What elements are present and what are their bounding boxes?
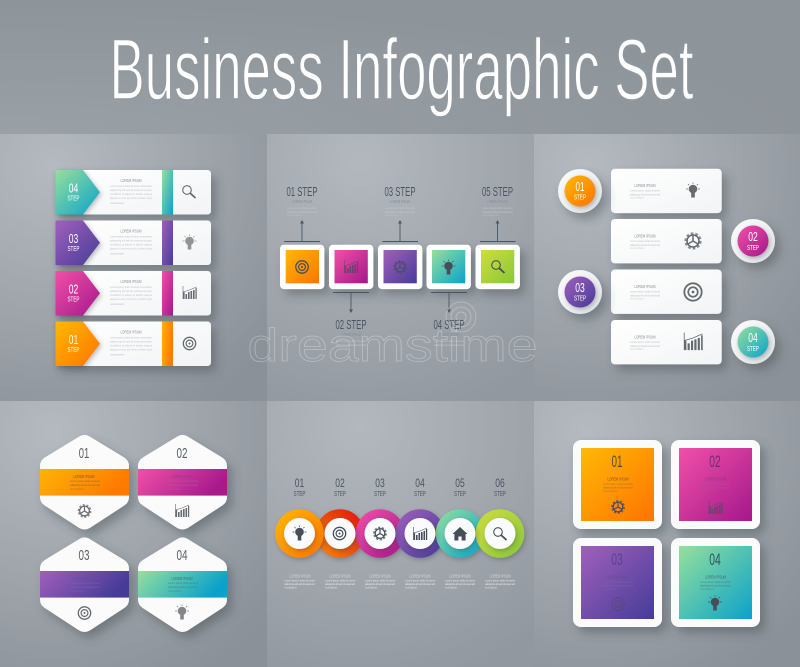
card: 03 step: incididunt ut labore et dolore magna (110, 242, 153, 246)
panel: arrow step cards (56, 170, 211, 366)
label: 01 step: LOREM IPSUM (292, 199, 312, 204)
circle 03 pink (356, 509, 404, 558)
square 03: 03 (611, 550, 623, 569)
step labels: STEP (454, 489, 466, 498)
card: 01 step (56, 322, 211, 366)
card 2: LOREM IPSUM (634, 234, 656, 238)
watermark (248, 302, 538, 371)
label: 03 step: Lorem ipsum dolor sit amet (385, 206, 415, 210)
card: 04 step: LOREM IPSUM (120, 178, 142, 183)
hexagon 03: LOREM IPSUM (74, 576, 95, 581)
badge 01: STEP (574, 194, 586, 202)
panel: six circles timeline (275, 476, 524, 590)
card: 02 step: 02 (69, 282, 78, 296)
card: 04 step: aliqua ut enim ad minim veniam quis (110, 196, 153, 200)
card: 04 step: Lorem ipsum dolor sit amet consectetur (110, 184, 152, 188)
square 02: LOREM IPSUM (705, 476, 726, 482)
step labels: STEP (494, 489, 506, 498)
badge 04: 04 (748, 330, 758, 345)
card: 02 step: LOREM IPSUM (120, 279, 142, 284)
card: 04 step: 04 (69, 180, 78, 196)
hexagon 02: adipiscing elit sed do eiusmod (168, 483, 199, 487)
label: 02 step: 02 STEP (336, 318, 366, 332)
square 02 (671, 440, 760, 529)
card 1: LOREM IPSUM (634, 183, 656, 188)
card: 02 step: Lorem ipsum dolor sit amet consectetur (110, 285, 152, 289)
circle 01 orange (275, 509, 324, 558)
label: 01 step: incididunt (287, 213, 303, 217)
label: 05 step: LOREM IPSUM (488, 199, 508, 204)
square 04: LOREM IPSUM (705, 574, 726, 580)
card 2: incididunt (630, 246, 644, 250)
square 1 (280, 245, 324, 289)
card: 03 step (56, 220, 211, 265)
label: 04 step: Lorem ipsum dolor sit amet (434, 339, 464, 343)
square 01: LOREM IPSUM (608, 476, 629, 482)
hexagon 04: 04 (176, 547, 188, 564)
captions: incididunt (485, 586, 497, 590)
hexagon 03: adipiscing elit sed do eiusmod (70, 585, 101, 589)
hexagon 02: 02 (176, 445, 188, 462)
step labels: STEP (334, 489, 346, 498)
captions: Lorem ipsum dolor sit amet (365, 578, 395, 582)
hexagon 01 (40, 445, 129, 520)
card: 01 step: STEP (68, 347, 80, 354)
captions: incididunt (325, 586, 337, 590)
circle 02 red (316, 509, 364, 558)
square 02: incididunt (700, 489, 714, 493)
card: 02 step: nostrud exerci (110, 302, 124, 306)
square 01: Lorem ipsum dolor sit amet (603, 482, 633, 486)
captions: Lorem ipsum dolor sit amet (485, 578, 515, 582)
label: 01 step: adipiscing elit sed do eiusmod (287, 210, 318, 214)
label: 02 step: adipiscing elit sed do eiusmod (336, 343, 367, 347)
badge 04 (731, 320, 775, 364)
badge 02: 02 (748, 229, 758, 244)
label: 03 step: adipiscing elit sed do eiusmod (385, 210, 416, 214)
card: 01 step: adipiscing elit sed do eiusmod tempor (110, 340, 152, 344)
captions: incididunt (284, 586, 297, 590)
hexagon 04: adipiscing elit sed do eiusmod (168, 585, 199, 589)
card: 04 step (56, 170, 211, 214)
badge 01 (558, 169, 602, 213)
label: 03 step: 03 STEP (384, 185, 416, 199)
square 02: 02 (709, 452, 721, 471)
step labels: STEP (374, 489, 386, 498)
badge 03 (558, 270, 602, 314)
step labels: STEP (294, 489, 306, 498)
hexagon 04: incididunt (168, 589, 182, 593)
card: 02 step: adipiscing elit sed do eiusmod tempor (110, 289, 152, 293)
label: 05 step: incididunt (482, 213, 499, 217)
card: 01 step: Lorem ipsum dolor sit amet consectetur (110, 336, 152, 340)
card: 03 step: adipiscing elit sed do eiusmod tempor (110, 238, 152, 242)
card 3: incididunt (630, 296, 644, 300)
label: 02 step: LOREM IPSUM (341, 332, 361, 337)
square 01: incididunt (603, 489, 617, 493)
panel: cards with round badges (558, 169, 775, 364)
card: 01 step: aliqua ut enim ad minim veniam quis (110, 348, 153, 352)
square 3 (378, 245, 422, 289)
watermark: dreamstime (248, 319, 538, 371)
hexagon 01: LOREM IPSUM (74, 474, 95, 479)
label: 04 step: LOREM IPSUM (439, 332, 459, 337)
panel: framed squares (573, 440, 760, 627)
label: 05 step: adipiscing elit sed do eiusmod (482, 210, 513, 214)
card 4: LOREM IPSUM (634, 334, 656, 340)
step labels: STEP (414, 489, 426, 498)
captions: adipiscing elit sed do eiusmod (405, 582, 436, 586)
label: 03 step: LOREM IPSUM (390, 199, 410, 204)
circle 06 lime (476, 509, 524, 558)
captions: LOREM IPSUM (490, 574, 511, 578)
captions: adipiscing elit sed do eiusmod (445, 582, 476, 586)
square 01 (573, 440, 662, 529)
panel: hexagons (40, 445, 227, 622)
card 2: adipiscing elit sed do eiusmod (630, 243, 661, 247)
card: 01 step: LOREM IPSUM (120, 330, 142, 334)
square 02: Lorem ipsum dolor sit amet (700, 482, 730, 486)
card 1 (611, 169, 722, 213)
hexagon 04 (138, 547, 227, 622)
card 1: incididunt (630, 196, 644, 200)
square 03: incididunt (603, 587, 617, 591)
badge 03: 03 (575, 280, 585, 295)
hexagon 03 (40, 547, 129, 622)
captions (284, 574, 516, 590)
label: 05 step: 05 STEP (482, 185, 513, 199)
card: 03 step: STEP (68, 246, 80, 253)
card 1: adipiscing elit sed do eiusmod (630, 192, 661, 196)
square 04: 04 (709, 550, 721, 569)
card 3: adipiscing elit sed do eiusmod (630, 294, 661, 298)
square 04: adipiscing elit sed do eiusmod (700, 584, 731, 588)
panel: timeline of squares (280, 185, 520, 347)
card: 03 step: nostrud exerci (110, 252, 124, 256)
label: 02 step (336, 318, 367, 347)
square 04: Lorem ipsum dolor sit amet (700, 580, 730, 584)
badge 02: STEP (747, 245, 759, 252)
captions: Lorem ipsum dolor sit amet (284, 578, 315, 582)
square 02: adipiscing elit sed do eiusmod (700, 486, 731, 490)
label: 01 step: 01 STEP (286, 185, 318, 199)
card 3: Lorem ipsum dolor sit amet (630, 290, 660, 294)
card: 03 step: aliqua ut enim ad minim veniam quis (110, 246, 153, 250)
label: 05 step (482, 185, 513, 217)
captions: adipiscing elit sed do eiusmod (284, 582, 315, 586)
card: 04 step: STEP (68, 196, 80, 202)
hexagon 02 (138, 445, 227, 520)
hexagon 03: Lorem ipsum dolor sit amet (70, 581, 100, 585)
card 2: Lorem ipsum dolor sit amet (630, 239, 660, 243)
badge 03: STEP (574, 296, 586, 302)
captions: Lorem ipsum dolor sit amet (405, 578, 435, 582)
card: 03 step: Lorem ipsum dolor sit amet consectetur (110, 234, 152, 238)
card 3: LOREM IPSUM (634, 284, 656, 289)
circle 05 teal (436, 509, 484, 558)
label: 03 step: incididunt (385, 213, 401, 217)
captions: LOREM IPSUM (290, 574, 311, 578)
captions: adipiscing elit sed do eiusmod (485, 582, 516, 586)
step labels: 02 (335, 476, 345, 490)
badge 01: 01 (576, 179, 584, 194)
card 4: adipiscing elit sed do eiusmod (630, 344, 661, 348)
square 01: 01 (612, 452, 622, 471)
square 03: adipiscing elit sed do eiusmod (603, 584, 634, 588)
square 04 (671, 538, 760, 627)
hexagon 03: 03 (78, 547, 90, 564)
square 03: LOREM IPSUM (608, 574, 629, 580)
square 4 (426, 245, 471, 289)
step labels: 03 (375, 476, 385, 490)
step labels: 05 (455, 476, 465, 490)
circle 04 purple (396, 509, 444, 558)
captions: Lorem ipsum dolor sit amet (325, 578, 355, 582)
card: 02 step: STEP (68, 296, 80, 304)
captions: adipiscing elit sed do eiusmod (365, 582, 396, 586)
card: 04 step: nostrud exerci (110, 201, 124, 205)
card 3 (611, 270, 722, 314)
step labels: 06 (495, 476, 505, 490)
hexagon 04: Lorem ipsum dolor sit amet (168, 581, 198, 585)
captions: LOREM IPSUM (370, 574, 391, 578)
card: 03 step: LOREM IPSUM (120, 228, 142, 234)
card 4: incididunt (630, 347, 644, 351)
label: 04 step: adipiscing elit sed do eiusmod (434, 343, 465, 347)
hexagon 01: Lorem ipsum dolor sit amet (70, 479, 100, 483)
card 2 (611, 219, 722, 263)
captions: LOREM IPSUM (330, 574, 351, 578)
captions: incididunt (365, 586, 377, 590)
step labels: 01 (295, 476, 304, 490)
card 1: Lorem ipsum dolor sit amet (630, 188, 660, 192)
captions: LOREM IPSUM (410, 574, 431, 578)
card: 02 step: incididunt ut labore et dolore magna (110, 293, 153, 297)
card 4: Lorem ipsum dolor sit amet (630, 340, 660, 344)
square 2 (329, 245, 373, 289)
label: 03 step (384, 185, 416, 217)
label: 04 step (434, 318, 465, 347)
card: 03 step: 03 (69, 231, 78, 246)
card: 04 step: adipiscing elit sed do eiusmod tempor (110, 188, 152, 192)
captions: incididunt (405, 586, 417, 590)
label: 05 step: Lorem ipsum dolor sit amet (482, 206, 513, 210)
captions: LOREM IPSUM (450, 574, 471, 578)
square 03 (573, 538, 662, 627)
hexagon 02: incididunt (168, 487, 182, 491)
white discs and icons (284, 518, 516, 549)
hexagon 01: adipiscing elit sed do eiusmod (70, 483, 101, 487)
label: 04 step: 04 STEP (434, 318, 464, 332)
square 5 (476, 245, 520, 289)
card: 02 step (56, 271, 211, 316)
badge 02 (731, 219, 775, 263)
label: 01 step: Lorem ipsum dolor sit amet (287, 206, 317, 210)
card 4 (611, 320, 722, 364)
captions: adipiscing elit sed do eiusmod (325, 582, 356, 586)
card: 01 step: nostrud exerci (110, 352, 124, 356)
card: 01 step: incididunt ut labore et dolore magna (110, 344, 153, 348)
connectors and arrows (284, 220, 516, 313)
hexagon 03: incididunt (70, 589, 84, 593)
square 04: incididunt (700, 587, 714, 591)
captions: incididunt (445, 586, 457, 590)
step labels (294, 476, 506, 498)
captions: Lorem ipsum dolor sit amet (445, 578, 475, 582)
hexagon 04: LOREM IPSUM (172, 576, 193, 581)
square 01: adipiscing elit sed do eiusmod (603, 486, 634, 490)
square 03: Lorem ipsum dolor sit amet (603, 580, 633, 584)
card: 04 step: incididunt ut labore et dolore magna (110, 192, 153, 196)
card: 02 step: aliqua ut enim ad minim veniam quis (110, 297, 153, 301)
label: 02 step: Lorem ipsum dolor sit amet (336, 339, 366, 343)
hexagon 01: incididunt (70, 487, 84, 491)
hexagon 02: Lorem ipsum dolor sit amet (168, 479, 198, 483)
step labels: 04 (415, 476, 425, 490)
card: 01 step: 01 (69, 332, 78, 347)
hexagon 02: LOREM IPSUM (172, 474, 193, 479)
hexagon 01: 01 (79, 445, 89, 462)
label: 01 step (286, 185, 318, 217)
badge 04: STEP (747, 346, 759, 353)
